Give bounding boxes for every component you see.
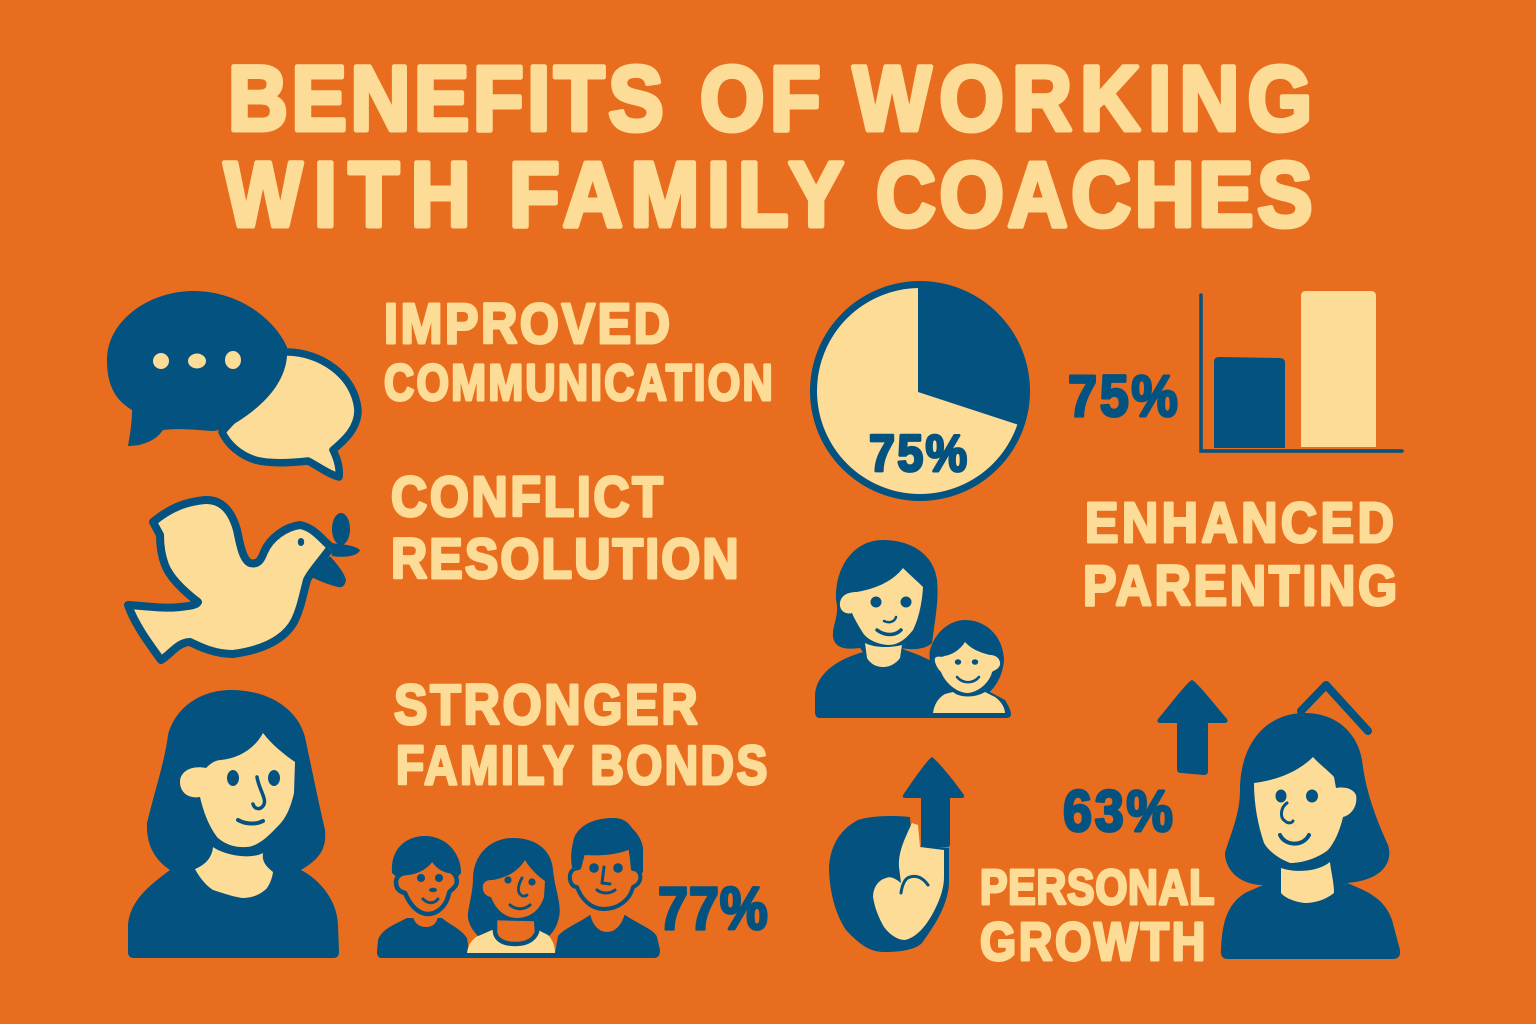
label: personal growth [980, 860, 1214, 972]
label: enhanced parenting: ENHANCED [1085, 491, 1394, 555]
child [929, 620, 1005, 713]
label: personal growth: GROWTH [980, 911, 1205, 972]
label: improved communication: COMMUNICATION [384, 354, 773, 411]
title: WORKING [853, 47, 1312, 150]
person: left child [377, 836, 470, 958]
icon: speech bubbles [107, 291, 358, 477]
label: enhanced parenting: PARENTING [1083, 554, 1397, 618]
stat: pie 75%: 75% [869, 425, 967, 483]
label: stronger family bonds: FAMILY BONDS [396, 734, 767, 796]
icon: head with growth arrow [829, 757, 964, 952]
title: BENEFITS [228, 47, 664, 150]
label: conflict resolution [391, 465, 739, 591]
person: middle woman [467, 838, 560, 953]
icon: woman with roof mark [1221, 685, 1400, 959]
stat: 75%: 75% [1068, 363, 1178, 429]
icon: family of three [377, 818, 660, 958]
title: COACHES [876, 143, 1313, 246]
label: improved communication [384, 292, 773, 411]
person: right man [378, 818, 660, 958]
icon: arrow up [1157, 680, 1228, 775]
label: personal growth: PERSONAL [980, 860, 1214, 915]
title [224, 47, 1312, 246]
label: improved communication: IMPROVED [384, 292, 670, 356]
label: conflict resolution: CONFLICT [391, 465, 663, 529]
label: enhanced parenting [1083, 491, 1397, 618]
title: FAMILY [509, 143, 844, 246]
icon: pie chart 75% [810, 281, 1030, 501]
icon: mother and child [815, 540, 1011, 718]
bar chart [1201, 291, 1402, 451]
stat: 63%: 63% [1063, 778, 1173, 844]
label: stronger family bonds: STRONGER [394, 673, 698, 737]
icon: woman portrait [128, 690, 339, 958]
title: WITH [224, 143, 471, 246]
title: OF [700, 47, 821, 150]
label: stronger family bonds [394, 673, 767, 796]
label: conflict resolution: RESOLUTION [391, 527, 739, 591]
icon: dove with olive branch [128, 500, 360, 660]
arrow up [903, 757, 964, 848]
stat: 77%: 77% [658, 875, 768, 943]
